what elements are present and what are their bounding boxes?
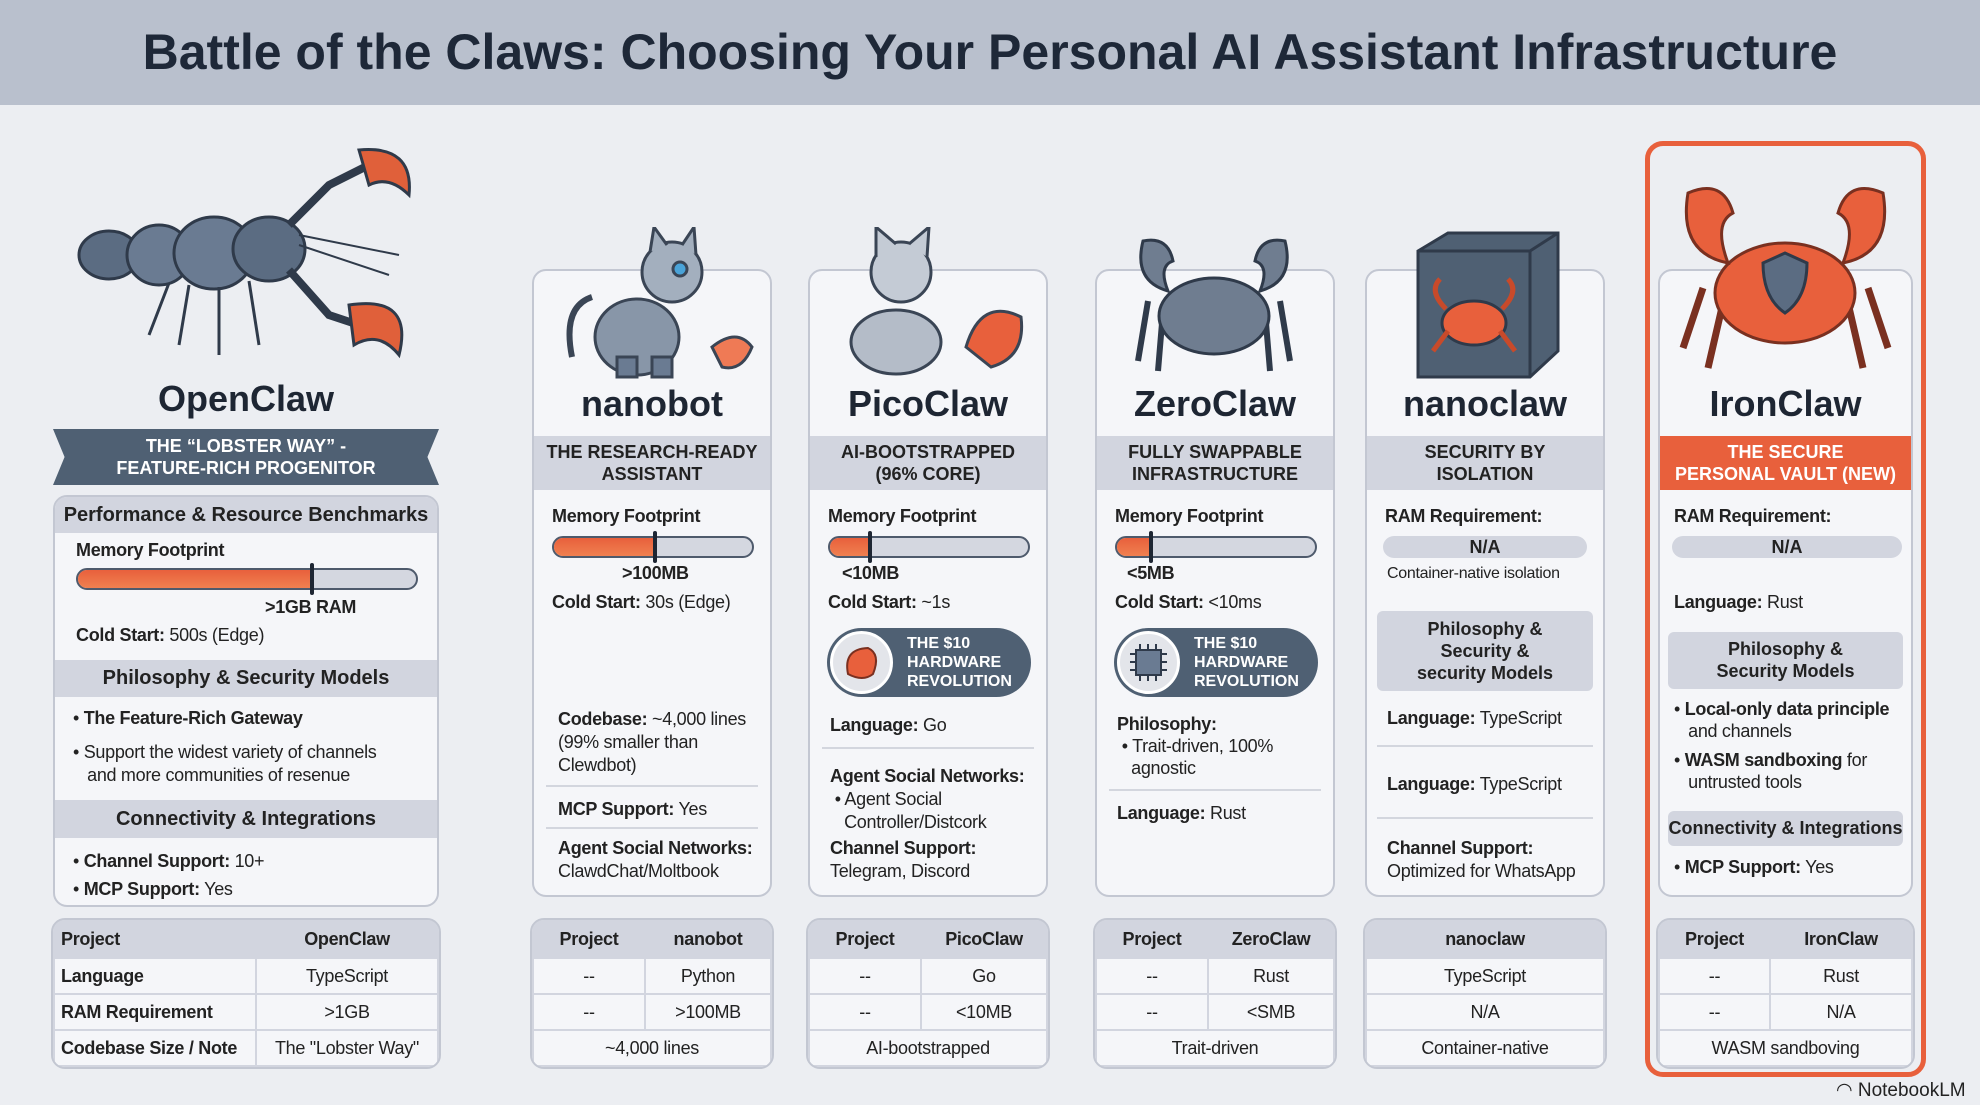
panel: nanobot: MCP Support: Yes xyxy=(558,799,707,819)
panel: IronClaw: RAM Requirement: xyxy=(1674,506,1831,526)
section heading: benchmarks: Performance & Resource Benchmarks xyxy=(64,504,428,526)
table: ZeroClaw xyxy=(1095,920,1335,1067)
badge: $10 hardware revolution xyxy=(1114,628,1318,697)
table: ZeroClaw: <SMB xyxy=(1247,1002,1295,1022)
panel: PicoClaw: Memory Footprint xyxy=(828,506,976,526)
table: PicoClaw xyxy=(808,920,1048,1067)
text: memory footprint: Memory Footprint xyxy=(76,540,224,560)
table: ZeroClaw: Rust xyxy=(1253,966,1289,986)
table: nanoclaw xyxy=(1365,920,1605,1067)
icon: crab in cube xyxy=(1416,232,1560,378)
badge: $10 hardware revolution: REVOLUTION xyxy=(907,673,1012,690)
table: PicoClaw: PicoClaw xyxy=(945,929,1023,949)
banner: lobster way xyxy=(53,429,439,485)
panel: nanoclaw: Channel Support: xyxy=(1387,838,1533,858)
table: PicoClaw: Go xyxy=(972,966,996,986)
panel: nanoclaw xyxy=(1365,269,1605,897)
table: OpenClaw: >1GB xyxy=(324,1002,370,1022)
bar: memory xyxy=(76,568,418,590)
box: philosophy: Security Models xyxy=(1716,661,1855,681)
panel: PicoClaw xyxy=(808,269,1048,897)
panel: PicoClaw: Cold Start: ~1s xyxy=(828,592,950,612)
table: ZeroClaw: -- xyxy=(1146,966,1158,986)
panel: IronClaw: Language: Rust xyxy=(1674,592,1803,612)
section heading: benchmarks xyxy=(55,497,437,533)
subtitle band xyxy=(1097,436,1333,490)
panel: IronClaw: • MCP Support: Yes xyxy=(1674,857,1834,877)
pill: N/A: N/A xyxy=(1772,537,1802,557)
panel: ZeroClaw: Cold Start: <10ms xyxy=(1115,592,1261,612)
table: OpenClaw: TypeScript xyxy=(306,966,388,986)
text: codebase: Codebase: ~4,000 lines xyxy=(558,709,746,729)
footer: NotebookLM mark: ◠ NotebookLM xyxy=(1836,1080,1966,1101)
panel: ZeroClaw: agnostic xyxy=(1131,758,1196,778)
icon: robot cat with shrimp xyxy=(566,227,754,378)
panel: nanobot: ClawdChat/Moltbook xyxy=(558,861,719,881)
icon: lobster xyxy=(78,148,411,358)
heading: nanobot: nanobot xyxy=(581,383,723,424)
table: PicoClaw: AI-bootstrapped xyxy=(866,1038,990,1058)
table: IronClaw: N/A xyxy=(1826,1002,1856,1022)
text: codebase xyxy=(558,709,746,775)
panel: PicoClaw: Channel Support: xyxy=(830,838,976,858)
icon: crab gray xyxy=(1135,238,1293,372)
IronClaw highlight outline xyxy=(1645,141,1926,1077)
table: nanobot: -- xyxy=(583,1002,595,1022)
subtitle band (orange): PERSONAL VAULT (NEW) xyxy=(1675,464,1896,484)
table: nanobot: Python xyxy=(681,966,735,986)
badge: $10 hardware revolution: REVOLUTION xyxy=(1194,673,1299,690)
text: codebase: (99% smaller than xyxy=(558,732,698,752)
panel: nanoclaw: Language: TypeScript xyxy=(1387,774,1562,794)
table: ZeroClaw: Trait-driven xyxy=(1172,1038,1258,1058)
bullets: connectivity: • Channel Support: 10+ xyxy=(73,851,264,871)
badge: $10 hardware revolution: THE $10 xyxy=(1194,635,1257,652)
text: codebase: Clewdbot) xyxy=(558,755,636,775)
table: nanobot: ~4,000 lines xyxy=(605,1038,699,1058)
section heading: philosophy xyxy=(55,660,437,697)
heading: IronClaw: IronClaw xyxy=(1709,383,1862,424)
table: IronClaw: WASM sandboving xyxy=(1712,1038,1859,1058)
subtitle band: SECURITY BY xyxy=(1425,442,1545,462)
table: OpenClaw xyxy=(53,920,439,1067)
panel: IronClaw: untrusted tools xyxy=(1688,772,1802,792)
panel: ZeroClaw: <5MB xyxy=(1127,563,1174,583)
table: nanoclaw: nanoclaw xyxy=(1445,929,1525,949)
table: OpenClaw: Language xyxy=(61,966,144,986)
table: IronClaw: IronClaw xyxy=(1804,929,1878,949)
panel: OpenClaw details xyxy=(53,495,439,907)
panel: nanoclaw: Container-native isolation xyxy=(1387,565,1560,582)
pill: N/A: N/A xyxy=(1470,537,1500,557)
table: PicoClaw: -- xyxy=(859,1002,871,1022)
pill: N/A xyxy=(1672,536,1902,558)
heading: OpenClaw: OpenClaw xyxy=(158,378,334,419)
panel: nanobot: Cold Start: 30s (Edge) xyxy=(552,592,730,612)
table: OpenClaw: RAM Requirement xyxy=(61,1002,213,1022)
badge: $10 hardware revolution: HARDWARE xyxy=(907,654,1001,671)
icon: cat with shrimp xyxy=(850,227,1024,376)
table: OpenClaw: Project xyxy=(61,929,120,949)
panel: IronClaw: • WASM sandboxing for xyxy=(1674,750,1867,770)
section heading: connectivity xyxy=(55,800,437,838)
panel: ZeroClaw: • Trait-driven, 100% xyxy=(1122,736,1273,756)
table: nanoclaw: TypeScript xyxy=(1444,966,1526,986)
panel: nanobot: Memory Footprint xyxy=(552,506,700,526)
table: OpenClaw: The "Lobster Way" xyxy=(275,1038,419,1058)
text: cold start: Cold Start: 500s (Edge) xyxy=(76,625,264,645)
subtitle band: ASSISTANT xyxy=(602,464,702,484)
subtitle band: (96% CORE) xyxy=(875,464,981,484)
table: OpenClaw: OpenClaw xyxy=(304,929,390,949)
panel: IronClaw: and channels xyxy=(1688,721,1792,741)
subtitle band (orange) xyxy=(1660,436,1911,490)
box: philosophy: Philosophy & xyxy=(1728,639,1843,659)
subtitle band: ISOLATION xyxy=(1437,464,1533,484)
bullets: connectivity: • MCP Support: Yes xyxy=(73,879,233,899)
table: IronClaw: Project xyxy=(1685,929,1744,949)
panel: ZeroClaw xyxy=(1095,269,1335,897)
table: nanoclaw: Container-native xyxy=(1421,1038,1549,1058)
box: philosophy xyxy=(1668,632,1903,689)
panel: ZeroClaw: Philosophy: xyxy=(1117,714,1217,734)
value: >1GB RAM: >1GB RAM xyxy=(265,597,356,617)
panel: ZeroClaw: Language: Rust xyxy=(1117,803,1246,823)
title bar xyxy=(0,0,1980,105)
table: nanoclaw: N/A xyxy=(1470,1002,1500,1022)
icon: crab with shield xyxy=(1680,187,1892,369)
table: IronClaw xyxy=(1658,920,1913,1067)
panel: PicoClaw: Controller/Distcork xyxy=(844,812,986,832)
box: philosophy xyxy=(1377,611,1593,691)
table: PicoClaw: Project xyxy=(836,929,894,949)
bullets: connectivity xyxy=(73,851,264,899)
panel: IronClaw: • Local-only data principle xyxy=(1674,699,1889,719)
table: IronClaw: -- xyxy=(1709,966,1720,986)
box: philosophy: Philosophy & xyxy=(1427,619,1542,639)
panel: IronClaw xyxy=(1658,269,1913,897)
pill: N/A xyxy=(1383,536,1587,558)
panel: nanoclaw: RAM Requirement: xyxy=(1385,506,1542,526)
table: nanobot: >100MB xyxy=(675,1002,741,1022)
bullets: philosophy: • The Feature-Rich Gateway xyxy=(73,708,303,728)
box: philosophy: Security & xyxy=(1440,641,1530,661)
bar: memory xyxy=(1115,536,1317,558)
table: IronClaw: Rust xyxy=(1823,966,1859,986)
table: IronClaw: -- xyxy=(1709,1002,1720,1022)
panel: PicoClaw: • Agent Social xyxy=(835,789,942,809)
panel: PicoClaw: Telegram, Discord xyxy=(830,861,970,881)
heading: nanoclaw: nanoclaw xyxy=(1403,383,1567,424)
subtitle band xyxy=(534,436,770,490)
title bar: Battle of the Claws: Choosing Your Personal AI Assistant Infrastructure xyxy=(143,24,1837,80)
bar: memory xyxy=(552,536,754,558)
table: ZeroClaw: ZeroClaw xyxy=(1232,929,1310,949)
panel: nanobot: Agent Social Networks: xyxy=(558,838,752,858)
table: nanobot xyxy=(532,920,772,1067)
panel: ZeroClaw: Memory Footprint xyxy=(1115,506,1263,526)
subtitle band xyxy=(1367,436,1603,490)
section heading: philosophy: Philosophy & Security Models xyxy=(103,667,389,689)
section heading: connectivity: Connectivity & Integrations xyxy=(116,808,376,830)
subtitle band xyxy=(810,436,1046,490)
subtitle band: THE RESEARCH-READY xyxy=(546,442,758,462)
subtitle band: AI-BOOTSTRAPPED xyxy=(841,442,1015,462)
banner: lobster way: FEATURE-RICH PROGENITOR xyxy=(116,458,376,478)
badge: $10 hardware revolution xyxy=(827,628,1031,697)
table: OpenClaw: Codebase Size / Note xyxy=(61,1038,237,1058)
panel: PicoClaw: <10MB xyxy=(842,563,899,583)
panel: OpenClaw details: and more communities of resenue xyxy=(87,765,350,785)
badge: $10 hardware revolution: THE $10 xyxy=(907,635,970,652)
box: connectivity xyxy=(1668,811,1903,846)
table: ZeroClaw: Project xyxy=(1123,929,1181,949)
box: connectivity: Connectivity & Integrations xyxy=(1668,818,1903,838)
box: philosophy: security Models xyxy=(1417,663,1553,683)
bar: memory xyxy=(828,536,1030,558)
panel: nanobot xyxy=(532,269,772,897)
panel: nanobot: >100MB xyxy=(622,563,689,583)
subtitle band (orange): THE SECURE xyxy=(1727,442,1844,462)
table: nanobot: nanobot xyxy=(674,929,742,949)
table: nanobot: Project xyxy=(560,929,618,949)
banner: lobster way: THE “LOBSTER WAY” - xyxy=(146,436,346,456)
panel: nanoclaw: Language: TypeScript xyxy=(1387,708,1562,728)
panel: PicoClaw: Language: Go xyxy=(830,715,946,735)
table: ZeroClaw: -- xyxy=(1146,1002,1158,1022)
panel: OpenClaw details: • Support the widest variety of channels xyxy=(73,742,376,762)
subtitle band: FULLY SWAPPABLE xyxy=(1128,442,1302,462)
heading: ZeroClaw: ZeroClaw xyxy=(1134,383,1296,424)
heading: PicoClaw: PicoClaw xyxy=(848,383,1008,424)
table: nanobot: -- xyxy=(583,966,595,986)
subtitle band: INFRASTRUCTURE xyxy=(1132,464,1298,484)
badge: $10 hardware revolution: HARDWARE xyxy=(1194,654,1288,671)
panel: nanoclaw: Optimized for WhatsApp xyxy=(1387,861,1575,881)
table: PicoClaw: <10MB xyxy=(956,1002,1012,1022)
table: PicoClaw: -- xyxy=(859,966,871,986)
panel: PicoClaw: Agent Social Networks: xyxy=(830,766,1024,786)
